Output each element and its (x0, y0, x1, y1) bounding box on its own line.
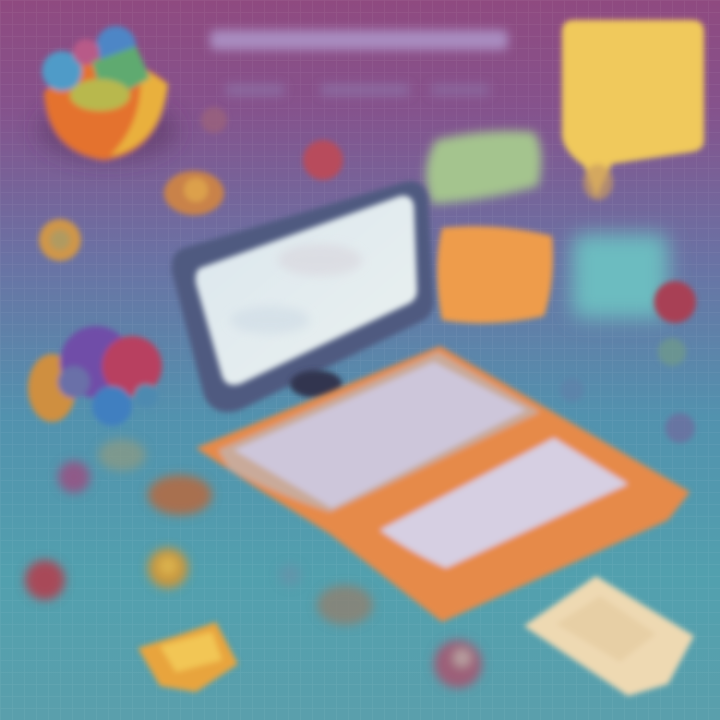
title (210, 30, 508, 96)
laptop screen (172, 181, 434, 412)
small dots: upper left (39, 107, 343, 261)
icon: colorful cluster left (28, 326, 162, 426)
orange callout (437, 226, 553, 323)
icon: yellow envelope (138, 622, 238, 692)
speech bubble: yellow (562, 20, 704, 200)
small dots: lower left (25, 439, 482, 688)
icon: pie bowl top left (38, 26, 178, 162)
note card (524, 576, 694, 696)
green callout (426, 131, 541, 204)
laptop base (196, 346, 690, 622)
teal callout (572, 234, 668, 318)
right side dots (560, 281, 696, 443)
